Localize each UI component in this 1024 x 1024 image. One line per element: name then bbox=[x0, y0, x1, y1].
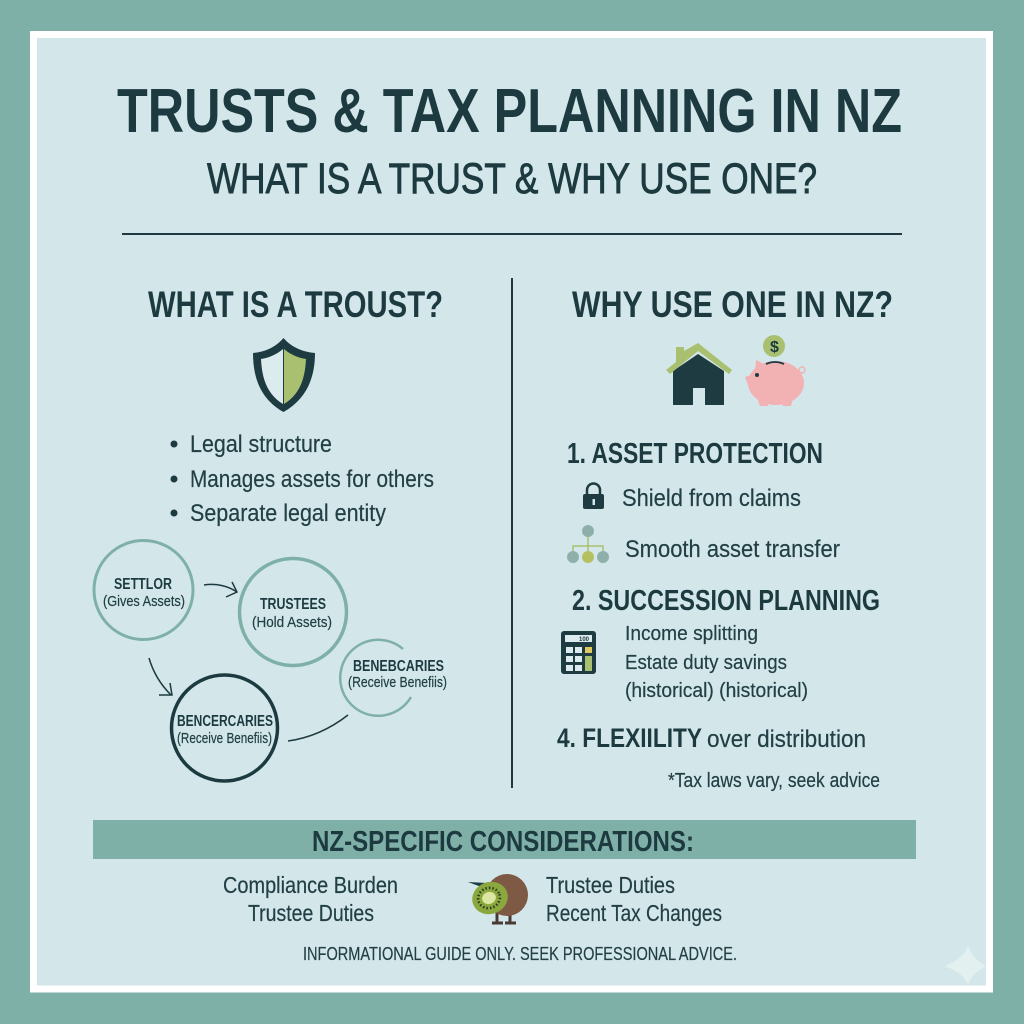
footnote: *Tax laws vary, seek advice bbox=[668, 770, 880, 792]
icon: lock bbox=[583, 484, 604, 509]
node: trustees: TRUSTEES bbox=[260, 596, 326, 613]
text: shield from claims: Shield from claims bbox=[622, 485, 801, 512]
node: trustees bbox=[240, 558, 346, 666]
arrow: settlor to beneficiaries bbox=[149, 658, 172, 695]
icon: shield bbox=[253, 338, 315, 412]
bullet list: Manages assets for others bbox=[190, 466, 434, 493]
text: right considerations: Recent Tax Changes bbox=[546, 900, 722, 926]
panel: why use one bbox=[557, 284, 893, 792]
heading: asset protection: 1. ASSET PROTECTION bbox=[567, 438, 823, 470]
connector: beneficiaries bbox=[288, 715, 348, 741]
node: settlor: (Gives Assets) bbox=[103, 593, 185, 610]
node: settlor: SETTLOR bbox=[114, 576, 172, 593]
subtitle: WHAT IS A TRUST & WHY USE ONE? bbox=[207, 155, 817, 203]
node: beneficiaries dark: BENCERCARIES bbox=[177, 713, 273, 730]
icon: hierarchy bbox=[567, 525, 609, 563]
icon: sparkle bbox=[945, 945, 986, 985]
node: trustees: (Hold Assets) bbox=[252, 614, 332, 631]
arrow: settlor to trustees bbox=[204, 582, 237, 597]
bullet list bbox=[170, 431, 434, 527]
icon: kiwi bbox=[468, 874, 528, 923]
heading: flexibility bbox=[557, 723, 866, 753]
icon: calculator: 100 bbox=[579, 637, 590, 643]
diagram: trust relationships bbox=[94, 540, 447, 781]
text: tax benefits: Estate duty savings bbox=[625, 652, 787, 674]
node: beneficiaries dark bbox=[172, 675, 278, 781]
node: beneficiaries light: BENEBCARIES bbox=[353, 658, 444, 675]
text: right considerations: Trustee Duties bbox=[546, 872, 675, 898]
text: tax benefits: (historical) (historical) bbox=[625, 680, 808, 702]
disclaimer: INFORMATIONAL GUIDE ONLY. SEEK PROFESSIONAL ADVICE. bbox=[303, 944, 737, 964]
text: right considerations bbox=[546, 872, 722, 926]
icon: calculator bbox=[561, 631, 596, 674]
icon: piggy bank bbox=[745, 335, 805, 406]
heading: why use one: WHY USE ONE IN NZ? bbox=[572, 284, 893, 325]
text: left considerations: Trustee Duties bbox=[248, 900, 374, 926]
icon: piggy bank: $ bbox=[770, 339, 779, 356]
icon: house bbox=[666, 343, 732, 405]
panel: what is a trust bbox=[94, 284, 447, 781]
text: smooth asset transfer: Smooth asset transfer bbox=[625, 536, 840, 563]
banner bbox=[93, 820, 916, 859]
heading: succession planning: 2. SUCCESSION PLANNING bbox=[572, 585, 880, 617]
node: settlor bbox=[94, 540, 193, 640]
panel: NZ-specific considerations bbox=[93, 820, 916, 964]
text: tax benefits bbox=[625, 623, 808, 702]
banner heading: NZ-SPECIFIC CONSIDERATIONS: bbox=[312, 826, 694, 858]
heading: flexibility: over distribution bbox=[707, 726, 866, 753]
heading: flexibility: 4. FLEXIILITY bbox=[557, 723, 702, 753]
bullet list: Legal structure bbox=[190, 431, 332, 458]
bullet list: Separate legal entity bbox=[190, 500, 386, 527]
node: beneficiaries light bbox=[340, 640, 447, 716]
text: left considerations: Compliance Burden bbox=[223, 872, 398, 898]
heading: what is a trust: WHAT IS A TROUST? bbox=[148, 284, 443, 325]
node: beneficiaries dark: (Receive Benefiis) bbox=[177, 730, 272, 747]
text: tax benefits: Income splitting bbox=[625, 623, 758, 645]
text: left considerations bbox=[223, 872, 398, 926]
node: beneficiaries light: (Receive Benefiis) bbox=[348, 674, 447, 691]
